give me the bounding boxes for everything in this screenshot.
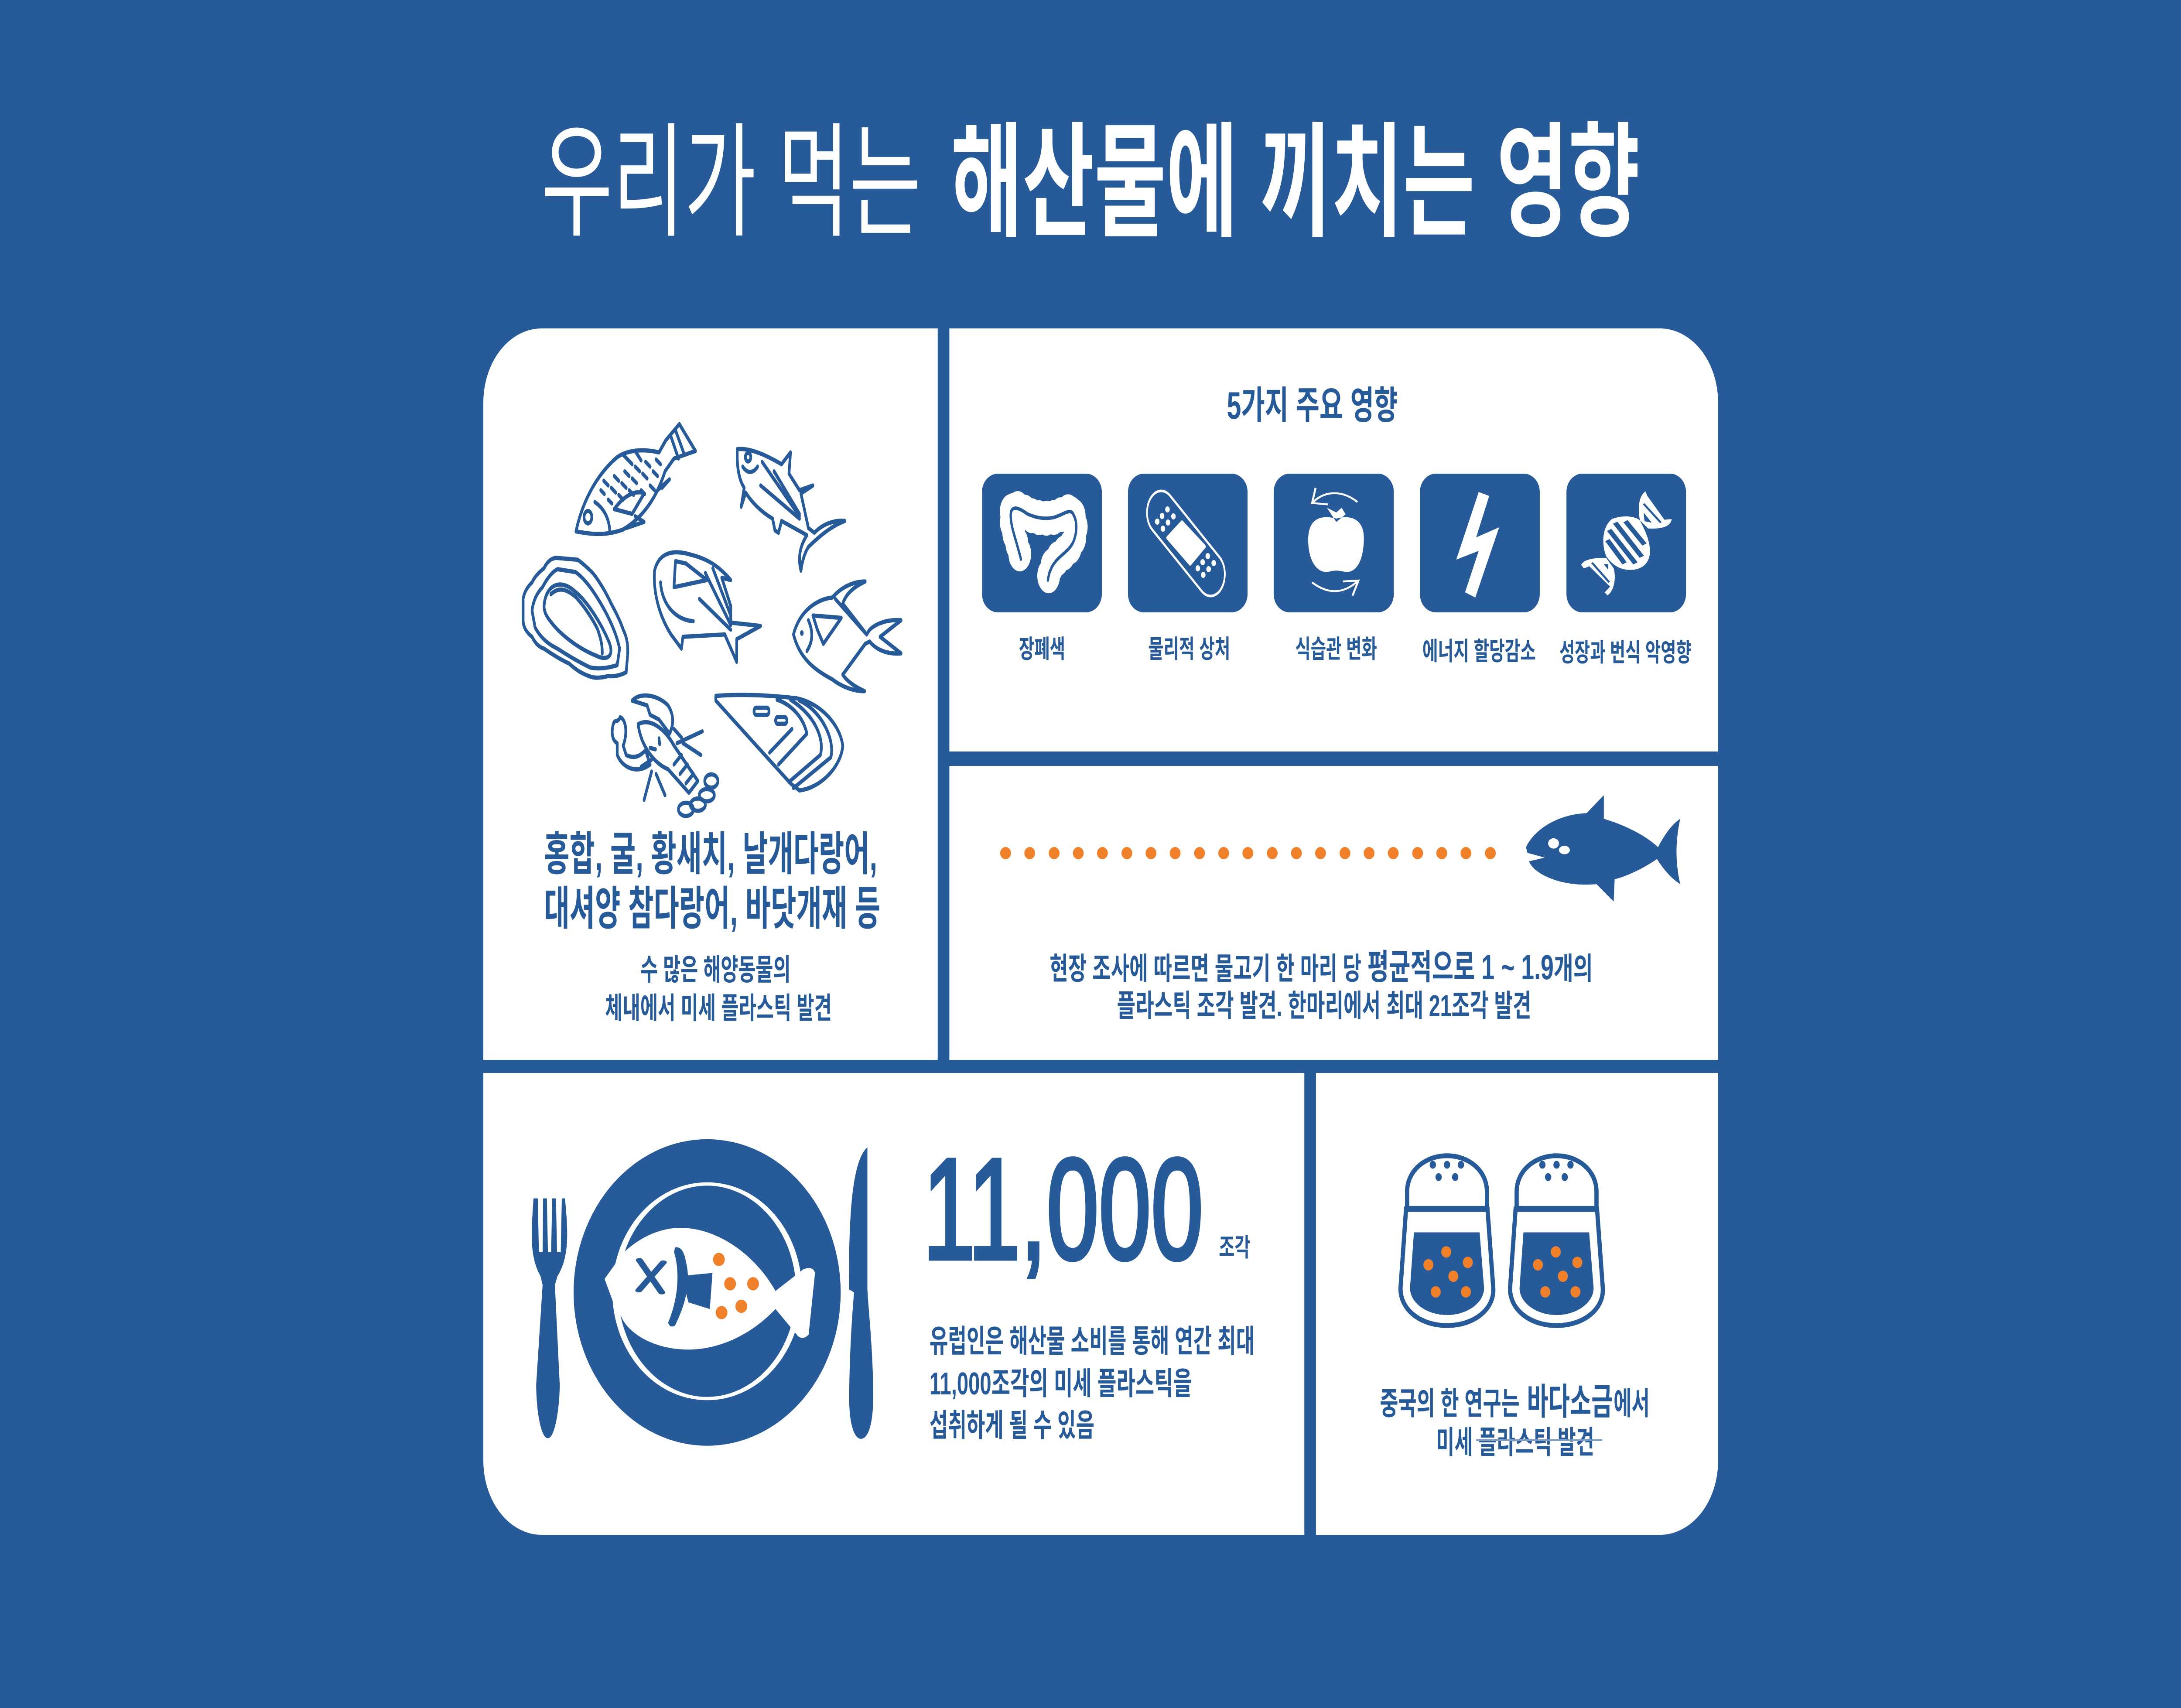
text: annual intake description xyxy=(930,1324,1255,1443)
big number: 11,000 xyxy=(923,1129,1203,1290)
icon: apple with arrows xyxy=(1274,474,1394,612)
text: species description: 체내에서 미세 플라스틱 발견 xyxy=(605,992,832,1025)
text: annual intake description: 유럽인은 해산물 소비를 통해 연간 최대 xyxy=(930,1324,1255,1359)
panel: five main effects xyxy=(949,328,1718,752)
icon: oyster xyxy=(523,558,628,678)
text: plastic per fish statement: 평균적으로 1 ~ 1.9 xyxy=(1367,948,1554,987)
text: species description: 수 많은 해양동물의 xyxy=(640,954,790,987)
text: sea salt finding: 미세 플라스틱 발견 xyxy=(1436,1425,1594,1460)
chart: dotted line of plastic pieces xyxy=(1000,847,1496,859)
label: eating habit change: 식습관 변화 xyxy=(1295,635,1377,663)
label: bowel obstruction: 장폐색 xyxy=(1019,635,1065,663)
icon: salt shakers xyxy=(1401,1156,1603,1325)
title xyxy=(541,113,1640,252)
text: sea salt finding: 에서 xyxy=(1614,1386,1650,1421)
text: annual intake description: 11,000조각의 미세 플라스틱을 xyxy=(930,1366,1192,1401)
text: plastic per fish statement: 현장 조사에 따르면 물고기 한 마리 당 xyxy=(1049,952,1361,986)
text: sea salt finding xyxy=(1380,1382,1650,1460)
icon: mussel xyxy=(716,695,843,790)
icon: plate xyxy=(574,1139,841,1446)
text: plastic per fish statement: 플라스틱 조각 발견. 한마리에서 최대 21조각 발견 xyxy=(1117,989,1531,1023)
panel: annual plastic intake xyxy=(483,1073,1304,1535)
text: species description xyxy=(605,954,832,1025)
panel: sea salt xyxy=(1316,1073,1718,1535)
heading: species list xyxy=(544,828,880,935)
icon: bandage xyxy=(1128,474,1248,612)
icon: plate with fish, fork and knife xyxy=(532,1139,873,1446)
icon: fish swallowing plastic xyxy=(1526,795,1680,902)
heading: five main effects: 5가지 주요 영향 xyxy=(1227,384,1398,427)
title: 해산물에 끼치는 영향 xyxy=(951,113,1640,252)
label: reduced energy allocation: 에너지 할당감소 xyxy=(1422,638,1536,666)
heading: species list: 홍합, 굴, 황새치, 날개다랑어, xyxy=(544,828,877,880)
icon: lobster xyxy=(612,696,718,816)
icon group: seafood line drawings xyxy=(523,424,901,816)
icon: round fish xyxy=(654,552,761,662)
icon: scaled fish xyxy=(576,424,695,534)
title: 우리가 먹는 xyxy=(541,113,921,252)
text: annual intake description: 섭취하게 될 수 있음 xyxy=(930,1408,1094,1443)
text: sea salt finding: 바다소금 xyxy=(1527,1382,1613,1423)
icon: fork xyxy=(532,1199,567,1438)
icon: intestine xyxy=(982,474,1102,612)
icon: knife xyxy=(849,1148,873,1439)
icon: DNA helix xyxy=(1566,474,1686,612)
heading: species list: 대셔양 참다랑어, 바닷개재 등 xyxy=(544,883,880,935)
text: sea salt finding: 중국의 한 연구는 xyxy=(1380,1386,1520,1421)
label: physical injury: 물리적 상처 xyxy=(1148,635,1230,663)
panel: seafood species xyxy=(483,328,938,1060)
unit label: 조각 xyxy=(1219,1234,1251,1262)
text: plastic per fish statement xyxy=(1049,948,1593,1023)
panel: plastic pieces per fish xyxy=(949,766,1718,1060)
label: growth and reproduction harm: 성장과 번식 악영향 xyxy=(1559,639,1692,667)
icon: lightning bolt xyxy=(1420,474,1540,612)
text: plastic per fish statement: 개의 xyxy=(1554,952,1593,986)
icon: pompano xyxy=(793,581,901,691)
icon: dead fish with plastic xyxy=(605,1228,815,1349)
icon: tuna xyxy=(737,449,845,570)
